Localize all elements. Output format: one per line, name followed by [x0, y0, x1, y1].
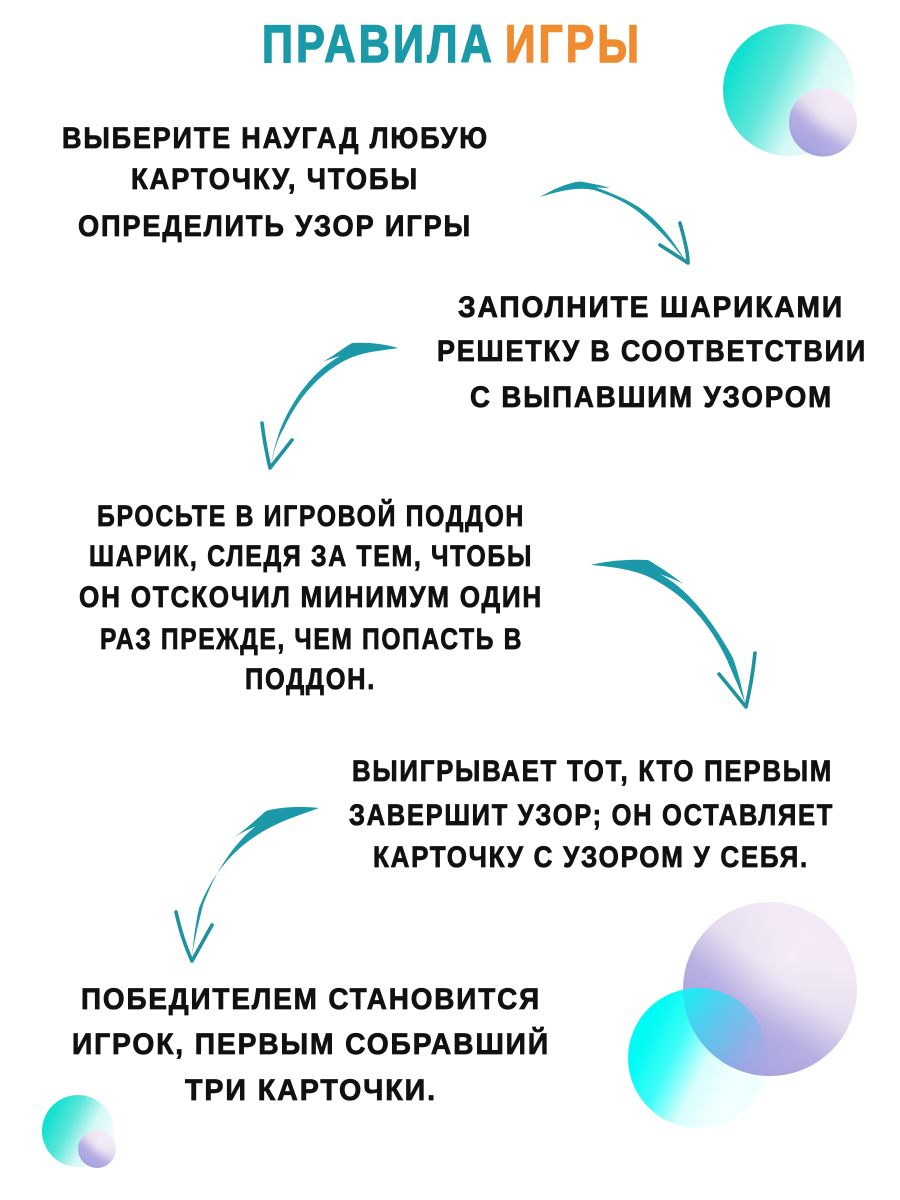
- text block: step 2: [437, 291, 867, 414]
- arrow: step 1 to step 2: [540, 182, 688, 263]
- text block: step 3: [79, 499, 543, 696]
- text block: step 5: ПОБЕДИТЕЛЕМ СТАНОВИТСЯ: [81, 983, 541, 1016]
- text block: step 2: ЗАПОЛНИТЕ ШАРИКАМИ: [458, 291, 844, 324]
- arrow: step 2 to step 3: [262, 343, 398, 468]
- text block: step 4: [349, 755, 834, 874]
- text block: step 1: [62, 122, 489, 243]
- text block: step 3: ПОДДОН.: [245, 663, 376, 696]
- text block: step 5: ТРИ КАРТОЧКИ.: [185, 1074, 437, 1107]
- text block: step 2: С ВЫПАВШИМ УЗОРОМ: [470, 381, 833, 414]
- text block: step 5: [72, 983, 550, 1107]
- text block: step 3: ОН ОТСКОЧИЛ МИНИМУМ ОДИН: [79, 581, 543, 614]
- decoration: top right spheres: [723, 24, 857, 156]
- text block: step 1: ОПРЕДЕЛИТЬ УЗОР ИГРЫ: [78, 210, 472, 243]
- text block: step 1: КАРТОЧКУ, ЧТОБЫ: [131, 163, 419, 196]
- text block: step 4: КАРТОЧКУ С УЗОРОМ У СЕБЯ.: [373, 841, 809, 874]
- text block: step 1: ВЫБЕРИТЕ НАУГАД ЛЮБУЮ: [62, 122, 489, 155]
- title: ПРАВИЛА: [262, 15, 495, 74]
- decoration: bottom left spheres: [42, 1095, 116, 1168]
- text block: step 4: ВЫИГРЫВАЕТ ТОТ, КТО ПЕРВЫМ: [352, 755, 833, 788]
- text block: step 3: БРОСЬТЕ В ИГРОВОЙ ПОДДОН: [97, 499, 525, 533]
- text block: step 3: РАЗ ПРЕЖДЕ, ЧЕМ ПОПАСТЬ В: [100, 623, 523, 656]
- text block: step 5: ИГРОК, ПЕРВЫМ СОБРАВШИЙ: [72, 1027, 550, 1061]
- arrow: step 4 to step 5: [176, 807, 319, 961]
- decoration: bottom right spheres: [628, 902, 857, 1128]
- title: ИГРЫ: [505, 15, 642, 74]
- arrow: step 3 to step 4: [591, 560, 755, 707]
- text block: step 3: ШАРИК, СЛЕДЯ ЗА ТЕМ, ЧТОБЫ: [89, 540, 533, 573]
